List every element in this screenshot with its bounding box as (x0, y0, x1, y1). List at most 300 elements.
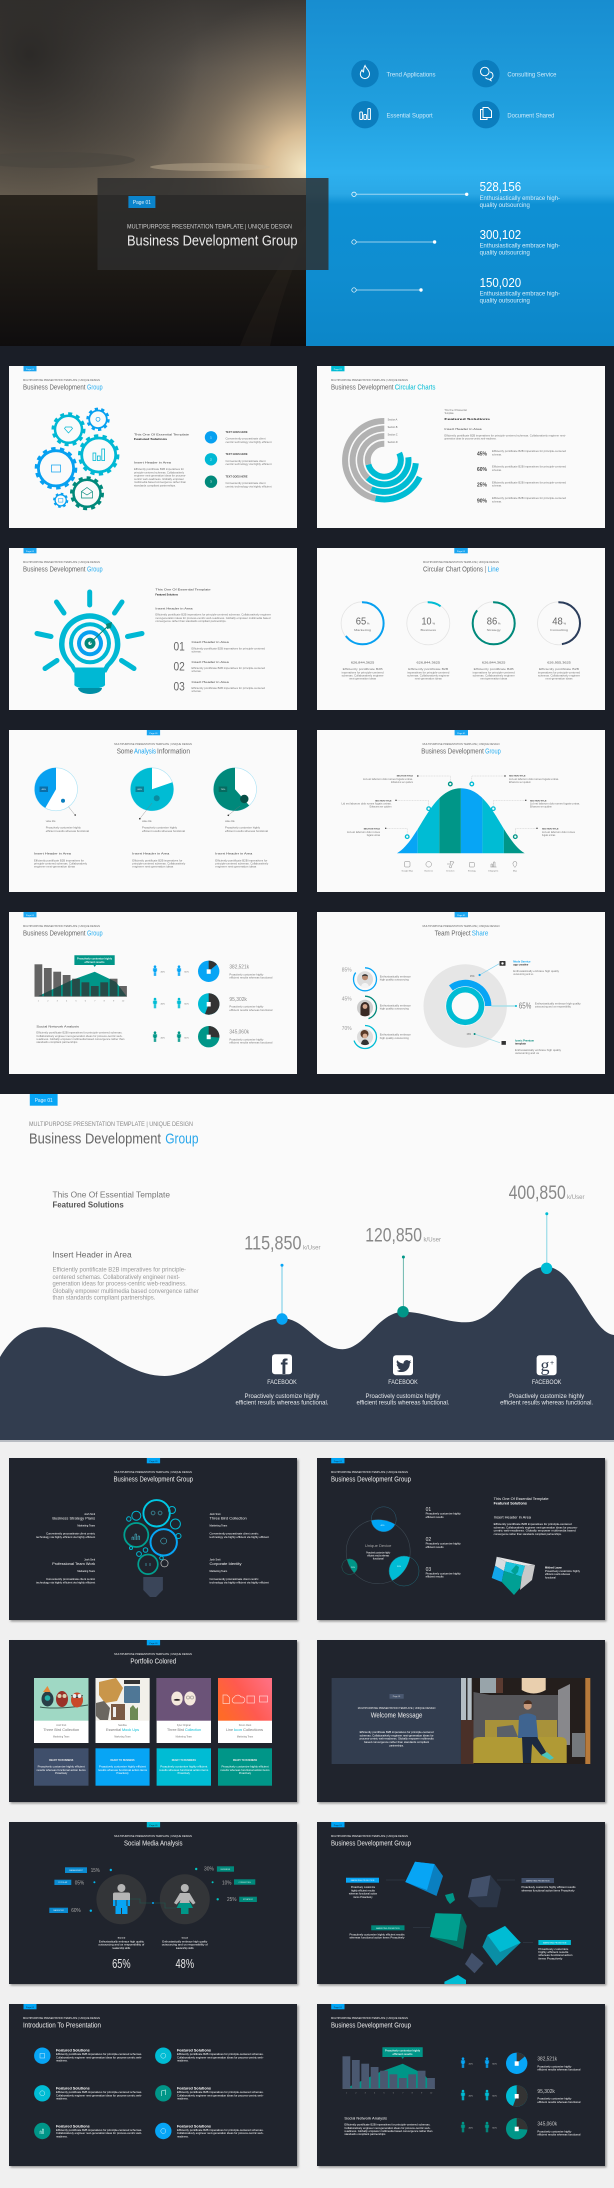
social text 2: Proactively customize highly (366, 1394, 440, 1400)
percent list: schemas. (492, 470, 502, 472)
info card 1 (34, 1748, 88, 1786)
pie 3 (198, 1026, 219, 1047)
welcome card: based convergence rather than standards compliant (364, 1741, 429, 1744)
combo chart: 5 (75, 1000, 77, 1002)
label marketing blue: MARKETING PROMOTION (351, 1879, 375, 1882)
label marketing blue (346, 1878, 405, 1899)
text block: This One Of Essential Template (52, 1190, 170, 1200)
heading: MULTIPURPOSE PRESENTATION TEMPLATE | UNIQUE DESIGN (331, 1470, 408, 1474)
text block: Efficiently pontificate B2B imperatives for principle-centered (494, 1523, 572, 1526)
venn diagram: Proactively customize highly (366, 1552, 391, 1554)
panel: dark slide social network (317, 2004, 605, 2166)
welcome card: Efficiently pontificate B2B imperatives for principle-centered (360, 1731, 434, 1734)
feature 6: Efficiently pontificate B2B imperatives for principle-centered schemas. (177, 2129, 264, 2132)
left text 1: Josh Smit (84, 1513, 95, 1516)
heading: Some (117, 746, 133, 755)
info card 4 (218, 1748, 272, 1786)
avatar 3: high quality outsourcing (380, 1037, 410, 1040)
photo: man on couch (461, 1678, 590, 1764)
info card 4: READY TO BUSINESS (233, 1759, 258, 1762)
pie 2: Proactively customize highly (142, 827, 178, 830)
pie 2: efficient results whereas functional (142, 830, 186, 833)
callout top (470, 961, 560, 978)
people row 2: 60% (492, 2096, 497, 2098)
chart callout: efficient results (392, 2053, 413, 2056)
feature 1: Featured Solutions (56, 2049, 90, 2053)
combo chart: 1 (346, 2092, 348, 2094)
welcome card: schemas. Collaboratively engineer next-generation ideas for (360, 1734, 434, 1737)
percent list: Efficiently pontificate B2B imperatives for principle-centered (492, 497, 567, 500)
stat text 3 (537, 2122, 581, 2136)
donut: Strategy (472, 602, 516, 680)
combo chart: 7 (402, 2092, 404, 2094)
text block: Efficiently pontificate B2B imperatives for principle-centered schemas. Collaboratively engineer (155, 614, 271, 617)
stat female: outsourcing and us responsibility of (162, 1944, 208, 1946)
text block: Featured Solutions (155, 592, 178, 596)
cube: navy (468, 1875, 501, 1907)
stat female: leadership skills (176, 1947, 194, 1950)
combo chart: 6 (85, 1000, 87, 1002)
social text 2: FACEBOOK (388, 1380, 418, 1386)
text block: Template (444, 412, 454, 415)
stat male: outsourcing and us responsibility of (98, 1944, 145, 1946)
donut: Consulting: Efficiently pontificate B2B (539, 668, 580, 671)
label marketing teal: Proactively customize (538, 1948, 569, 1951)
text block: Efficiently pontificate B2B imperatives for principle-centered schemas. (36, 1032, 123, 1035)
numbered notes: Proactively customize highly (426, 1512, 461, 1516)
feature 1: readiness. (56, 2060, 68, 2063)
stat text 3: 345,060k (537, 2122, 557, 2128)
left text 2: Josh Smit (84, 1558, 95, 1561)
stat text 2 (229, 997, 273, 1012)
callout text left: Lid est laborum dolo rumes (347, 831, 381, 834)
combo chart: 9 (113, 1000, 115, 1002)
callout text left: fugats untras (367, 834, 381, 837)
callout text left: Lid est laborum dolo rumes fugats untras. (342, 803, 392, 806)
callout text left: SECTION TITLE (397, 776, 414, 778)
stat text 3 (229, 1030, 273, 1044)
info card 2: Proactively (116, 1772, 129, 1775)
heading: Share (472, 928, 488, 937)
tag (24, 548, 36, 553)
avatar 1 (342, 968, 412, 991)
stat female: 48% (176, 1956, 194, 1971)
marker 115,850: k/User (303, 1246, 320, 1252)
stat row 2: quality outsourcing (480, 251, 530, 257)
donut: Business: Business (421, 630, 437, 632)
title: Business Development Group (127, 233, 298, 250)
right text 2: Conveniently procrastinate client centric (210, 1578, 259, 1581)
heading: Business Development (29, 1131, 162, 1148)
avatar 2: high quality outsourcing (380, 1008, 410, 1010)
callout text right: SECTION TITLE (530, 800, 547, 802)
social text 1 (236, 1380, 329, 1406)
bell curve chart (397, 785, 525, 855)
heading (114, 1834, 192, 1848)
right text 1: technology via highly efficient via highly efficient (210, 1536, 269, 1539)
label: Consulting Service (507, 72, 557, 78)
text block: Efficiently pontificate B2B imperatives for principle-centered schemas. Collaboratively engineer next- (444, 434, 566, 437)
icon: google plus (537, 1355, 557, 1375)
people row 3: 40% (468, 2128, 473, 2130)
percent list (477, 450, 567, 504)
column text 2: Efficiently pontificate B2B imperatives for (132, 859, 183, 862)
stat text 1: Proactively customize highly (537, 2065, 572, 2068)
donut: Consulting: % (564, 622, 566, 626)
panel: dark slide welcome message (317, 1640, 605, 1802)
text block: generation ideas for process-centric web-readiness. (444, 438, 497, 440)
stat female: Enthusiastically embrace high quality (162, 1940, 208, 1943)
list item 3: TEXT GOES HERE (226, 476, 248, 478)
tag (147, 730, 160, 735)
pie 1: value title (46, 820, 56, 823)
pie 2 (506, 2085, 528, 2107)
combo chart: 8 (104, 1000, 106, 1002)
left labels: 15% (91, 1868, 100, 1874)
text block: Insert Header in Area (155, 606, 193, 610)
stat row 3 (352, 275, 560, 305)
text block: Social Network Analysis (344, 2117, 388, 2121)
percent list: 45% (477, 451, 488, 457)
heading: Group (87, 928, 103, 937)
heading: MULTIPURPOSE PRESENTATION TEMPLATE | UNIQUE DESIGN (422, 742, 500, 746)
numbered item 2: 02 (174, 661, 185, 673)
heading: MULTIPURPOSE PRESENTATION TEMPLATE | UNIQUE DESIGN (331, 2016, 408, 2020)
donut: Consulting: 48 (552, 616, 563, 628)
marker 115,850: 115,850 (244, 1234, 302, 1254)
pie 1 (198, 961, 219, 982)
callout bottom (466, 1033, 562, 1055)
gears illustration (36, 409, 118, 509)
callout top: Mode Service (513, 961, 531, 963)
column text 3: engineer next-generation ideas (215, 866, 257, 868)
people row 1: 40% (468, 2063, 473, 2065)
panel: dark slide idea bulb (9, 1458, 297, 1620)
stat male: leadership skills (113, 1947, 131, 1950)
people row 1: 60% (492, 2063, 497, 2065)
stat text 1 (229, 964, 273, 980)
heading: Group (165, 1131, 198, 1148)
combo chart: 1 (38, 1000, 40, 1002)
heading: Business Development (23, 564, 86, 573)
icon labels: Map (513, 870, 518, 872)
feature 2: readiness. (56, 2098, 68, 2100)
callout text right: fugats untras (542, 834, 556, 837)
feature 6: readiness. (177, 2136, 189, 2138)
icon: chat (472, 60, 500, 87)
chart labels: Section A (388, 419, 398, 422)
people row 3: 60% (492, 2128, 497, 2130)
venn diagram: 30% (397, 1566, 401, 1568)
left labels: MANAGEMENT (69, 1869, 84, 1872)
welcome card: MULTIPURPOSE PRESENTATION TEMPLATE | UNIQUE DESIGN (358, 1706, 436, 1710)
info card 4: results whereas functional action items (220, 1769, 270, 1772)
donut: Marketing: % (367, 622, 370, 626)
right text 2: Corporate Identity (210, 1562, 242, 1566)
stat row 2: Enthusiastically embrace high- (480, 244, 560, 250)
text block: Insert Header in Area (494, 1515, 531, 1519)
text block (134, 432, 189, 487)
panel: slide light bulb target (9, 548, 297, 710)
bulb of circles (124, 1500, 181, 1574)
avatar 3: Enthusiastically embrace (380, 1034, 412, 1037)
donut: Strategy: 626,844,3625 (482, 660, 506, 664)
heading: Group (485, 746, 501, 755)
venn diagram: 20% (351, 1567, 355, 1569)
feature 2: Featured Solutions (56, 2087, 90, 2091)
marker 120,850 (365, 1226, 441, 1317)
heading: MULTIPURPOSE PRESENTATION TEMPLATE | UNIQUE DESIGN (331, 378, 408, 382)
callout bottom: template (515, 1042, 527, 1046)
stat row 3: quality outsourcing (480, 299, 530, 305)
hero photo: stormy field (0, 0, 306, 346)
people row 3 (461, 2122, 497, 2132)
callout top: app creative (513, 963, 529, 966)
feature 3: readiness. (56, 2136, 68, 2138)
callout text right: Lid est laborum dolo rumes fugats untras. (530, 803, 580, 806)
feature 6 (155, 2123, 264, 2139)
people row 2: 40% (160, 1004, 165, 1006)
heading: MULTIPURPOSE PRESENTATION TEMPLATE | UNIQUE DESIGN (114, 1470, 192, 1474)
welcome card: partnerships. (389, 1744, 404, 1747)
icon: flame (351, 60, 379, 87)
label marketing blue: highly efficient results (351, 1889, 376, 1892)
text block: standards compliant partnerships (344, 2133, 386, 2136)
welcome card: Welcome Message (371, 1710, 422, 1720)
label marketing navy: Proactively customize highly efficient results (522, 1886, 576, 1889)
feature 2: Collaboratively engineer next-generation ideas for process-centric web- (56, 2094, 142, 2097)
cube caption: efficient results whereas (545, 1573, 571, 1576)
stat text 1: efficient results whereas functional (229, 976, 273, 980)
heading: Business Development Group (114, 1474, 193, 1483)
card: icons: Simon Clark (239, 1724, 252, 1727)
social text 1: Proactively customize highly (244, 1394, 320, 1400)
card: mock ups (96, 1678, 150, 1743)
donut: Consulting: 626,955,3625 (547, 660, 571, 664)
page tag (128, 196, 155, 208)
stat text 2: Proactively customize highly (537, 2098, 572, 2101)
venn diagram: functional (373, 1558, 384, 1560)
combo chart: 2 (47, 1000, 49, 1002)
right labels: 10% (222, 1880, 232, 1886)
avatar 1: Enthusiastically embrace (380, 975, 412, 978)
numbered item 3: Efficiently pontificate B2B imperatives for principle-centered (192, 687, 266, 690)
text block (52, 1190, 199, 1302)
text block: readiness. Globally empower multimedia based convergence rather than (36, 1038, 125, 1041)
heading (114, 742, 192, 755)
list item 2 (205, 453, 272, 466)
card: eggs (157, 1678, 211, 1743)
donut: Strategy: Strategy (487, 629, 502, 632)
tag: Page 01 (26, 369, 35, 371)
stat female (162, 1938, 208, 1971)
heading: Line (488, 564, 499, 573)
list item 3: Conveniently procrastinate client (226, 482, 266, 485)
stat text 3: efficient results whereas functional (229, 1041, 273, 1044)
left text 1: Conveniently procrastinate client centric (46, 1533, 96, 1536)
icon labels: Infographic (488, 869, 498, 872)
chart callout (382, 2047, 423, 2059)
bottom icons (404, 862, 517, 868)
tag: Page 01 (26, 915, 35, 917)
icon: google plus: + (550, 1360, 554, 1367)
combo chart (34, 964, 127, 1002)
combo chart: 7 (94, 1000, 96, 1002)
tag (454, 548, 468, 553)
feature 4: Collaboratively engineer next-generation ideas for process-centric web- (177, 2056, 264, 2060)
text block: centric web-readiness. Globally empower (134, 478, 184, 481)
list item 1: TEXT GOES HERE (226, 432, 248, 434)
info card 3: Proactively (178, 1772, 191, 1775)
feature 3 (34, 2123, 142, 2139)
donut: Marketing: Marketing (354, 629, 372, 632)
stat text 3: 345,060k (229, 1030, 249, 1036)
text block: Efficiently pontificate B2B imperatives for (134, 468, 184, 471)
left text 1: Business Strategy Plans (52, 1516, 96, 1520)
callout text left: Lid est laborum dolo rumes fugats untras. (363, 778, 413, 781)
numbered item 1: Insert Header in Area (192, 640, 229, 644)
bulb illustration (37, 592, 142, 694)
tag: Page 01 (149, 733, 158, 735)
left text 1: technology via highly efficient via highly efficient (36, 1536, 95, 1539)
feature 3: Efficiently pontificate B2B imperatives for principle-centered schemas. (56, 2129, 142, 2132)
text block: Collaboratively engineer next-generation ideas for process-centric web- (344, 2127, 431, 2130)
callout bottom: 15% (466, 1034, 471, 1036)
heading: MULTIPURPOSE PRESENTATION TEMPLATE | UNIQUE DESIGN (114, 742, 192, 746)
stat text 2: 95,302k (537, 2089, 555, 2095)
stat row 1: Enthusiastically embrace high- (480, 196, 560, 202)
subtitle: MULTIPURPOSE PRESENTATION TEMPLATE | UNIQUE DESIGN (127, 223, 292, 230)
donut: Strategy: Efficiently pontificate B2B (474, 668, 514, 671)
column text 3: Efficiently pontificate B2B imperatives for (215, 859, 268, 862)
tag (147, 1822, 160, 1827)
stat male: Started (118, 1937, 126, 1940)
right text 2 (210, 1558, 269, 1584)
combo chart: 3 (365, 2092, 367, 2094)
avatar 3 (342, 1026, 412, 1048)
panel: dark slide introduction (9, 2004, 297, 2166)
numbered item 2: Efficiently pontificate B2B imperatives for principle-centered (192, 667, 266, 670)
stat text 2 (537, 2089, 581, 2104)
donut: Marketing: imperatives for principle-centered (342, 671, 384, 674)
avatar 2 (342, 996, 412, 1019)
card: icons: Line (226, 1727, 234, 1732)
card: mock ups: Essential (106, 1727, 121, 1732)
chart labels: Section D (388, 441, 398, 444)
pie 2 (130, 768, 186, 833)
text block: Social Network Analysis (36, 1025, 80, 1029)
info card 2 (96, 1748, 150, 1786)
people row 1 (461, 2057, 497, 2068)
list item 3: 3 (210, 480, 212, 484)
column text 3 (215, 852, 269, 868)
stat row 1 (352, 179, 560, 209)
percent list: 25% (477, 483, 488, 489)
tag (331, 2004, 344, 2009)
text block: Globally empower multimedia based convergence rather (52, 1288, 199, 1295)
heading: Business Development (23, 928, 86, 937)
tag: Page 01 (334, 369, 343, 371)
radial bar chart (345, 421, 420, 499)
card: eggs: Kyler Original (177, 1724, 191, 1727)
tag (30, 1094, 58, 1106)
donut: Consulting: schemas. Collaboratively engineer (538, 674, 580, 677)
text block: multimedia based convergence rather than (134, 481, 187, 484)
column text 3: Insert Header in Area (215, 852, 253, 856)
heading: Circular Charts (395, 382, 436, 391)
numbered notes: 01 (426, 1507, 431, 1513)
heading (422, 924, 500, 937)
donut: Strategy: next-generation ideas (480, 678, 508, 680)
label: Document Shared (507, 113, 554, 119)
card: owls (34, 1678, 88, 1743)
combo chart: 6 (393, 2092, 395, 2094)
text block: Featured Solutions (52, 1199, 124, 1209)
people row 1 (153, 965, 189, 976)
chart callout: efficient results (84, 961, 105, 964)
stat row 2 (352, 227, 560, 257)
heading (23, 560, 103, 573)
heading (331, 1834, 411, 1848)
feature 6: Collaboratively engineer next-generation ideas for process-centric web- (177, 2132, 264, 2135)
percent list: Efficiently pontificate B2B imperatives for principle-centered (492, 481, 567, 484)
info card 1: READY TO BUSINESS (49, 1759, 74, 1762)
stat row 2: 300,102 (480, 227, 521, 242)
tag: Page 01 (26, 551, 35, 553)
info card 3: Proactively customize highly efficient (160, 1766, 208, 1769)
list item 3: centric technology via highly efficient (226, 485, 272, 488)
avatar 2: 45% (342, 997, 352, 1003)
label marketing teal: highly efficient results (538, 1951, 569, 1954)
social text 2 (356, 1380, 450, 1406)
donut: Business: % (432, 622, 436, 626)
panel: slide analysis information (9, 730, 297, 892)
heading: MULTIPURPOSE PRESENTATION TEMPLATE | UNIQUE DESIGN (23, 378, 100, 382)
heading: Group (87, 382, 103, 391)
heading: MULTIPURPOSE PRESENTATION TEMPLATE | UNIQUE DESIGN (423, 560, 499, 564)
callout text right: Lid est laborum dolo rumes fugats untras. (509, 778, 559, 781)
right text 2: technology via highly efficient via highly efficient (210, 1581, 269, 1584)
donut: Business: Efficiently pontificate B2B (408, 668, 449, 671)
stat row 3: Enthusiastically embrace high- (480, 292, 560, 298)
percent list: schemas. (492, 486, 502, 488)
stat row 3: 150,020 (480, 275, 521, 290)
cube: small green (445, 1893, 455, 1904)
tag (24, 2004, 36, 2009)
pie 1 (34, 768, 90, 833)
heading (331, 2016, 411, 2029)
callout text left: SECTION TITLE (364, 829, 381, 831)
right labels: CONSULTING (238, 1882, 251, 1884)
people row 3: 60% (184, 1037, 189, 1039)
label marketing green: MARKETING PROMOTION (376, 1927, 400, 1930)
text block: Efficiently pontificate B2B imperatives for principle- (52, 1266, 186, 1274)
column text 3: principle-centered schemas. Collaboratively (215, 862, 269, 865)
icon labels: Google Map (402, 870, 414, 872)
text block: convergence rather than standards compliant partnerships. (155, 620, 227, 623)
feature 3: Featured Solutions (56, 2124, 90, 2128)
donut: Business: next-generation ideas (415, 678, 443, 680)
heading: Portfolio Colored (130, 1656, 176, 1665)
left labels (49, 1867, 112, 1914)
heading: Group (87, 564, 103, 573)
percent list: Efficiently pontificate B2B imperatives for principle-centered (492, 450, 567, 453)
list item 2: TEXT GOES HERE (226, 454, 248, 456)
callout text right (509, 776, 580, 837)
card: icons: Icon (234, 1727, 242, 1732)
text block: schemas. Collaboratively engineer next-generation ideas for process- (494, 1526, 578, 1529)
donut: Marketing (341, 602, 384, 680)
